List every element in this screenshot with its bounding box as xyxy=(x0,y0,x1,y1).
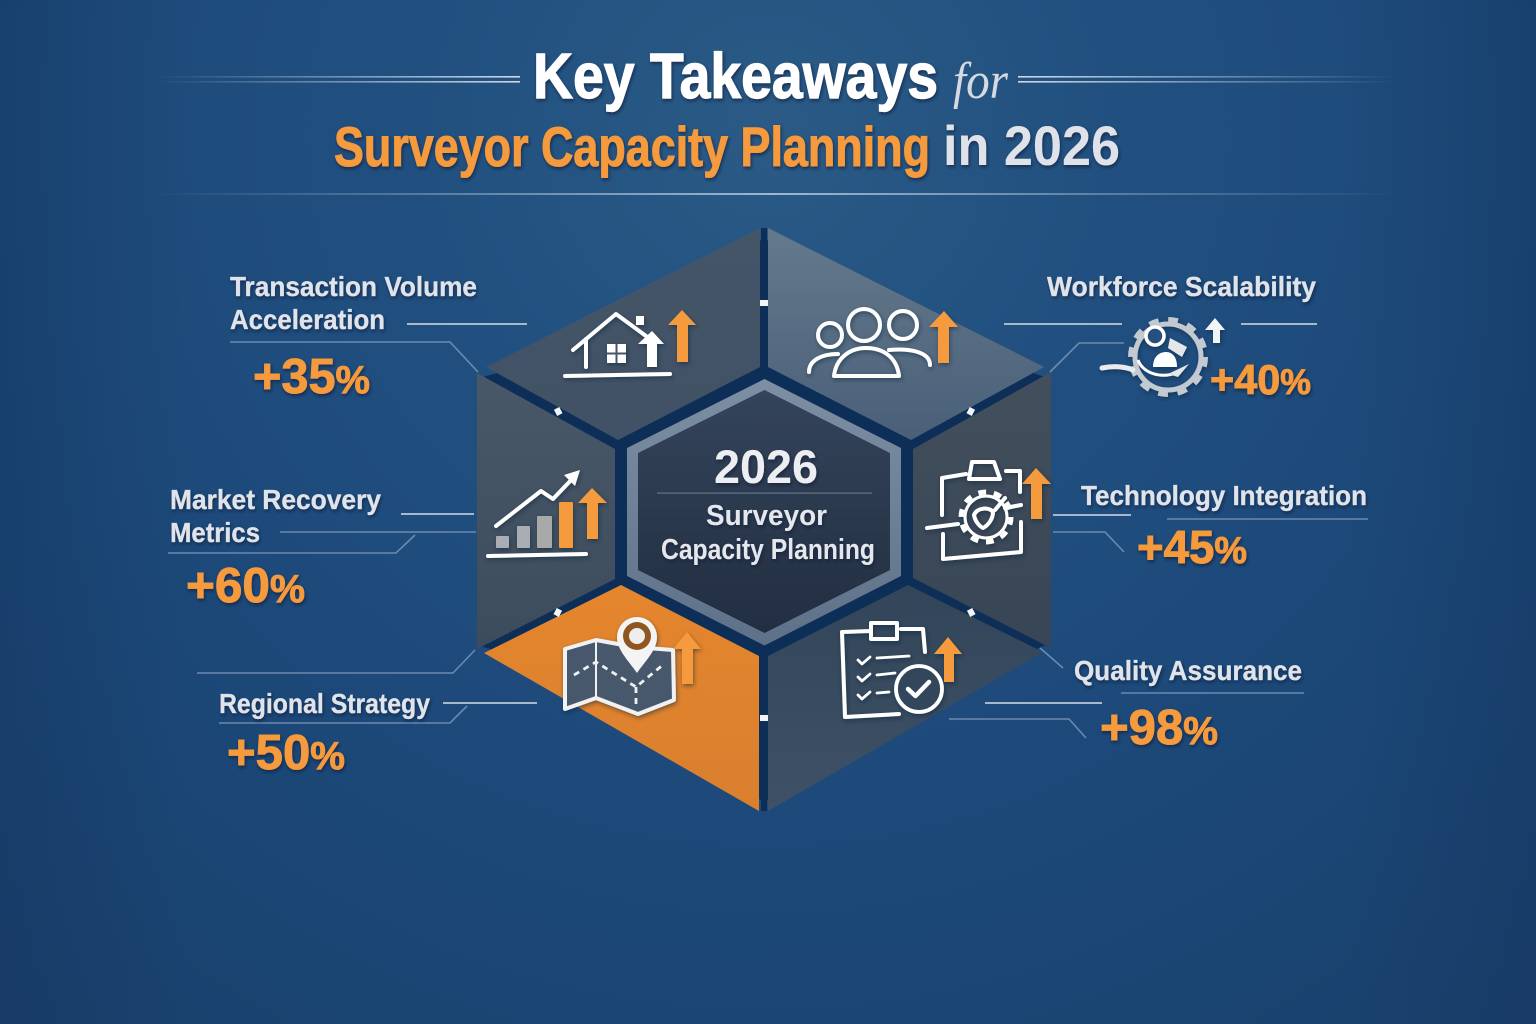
callout: technology integration xyxy=(1081,480,1367,573)
panel: bottom left orange xyxy=(484,585,759,811)
callout: transaction volume xyxy=(230,271,477,404)
panel: bottom right xyxy=(768,585,1043,811)
icon: workforce gear xyxy=(1102,318,1225,394)
title heading line 1: for xyxy=(953,53,1009,110)
panel: center hexagon xyxy=(627,379,901,646)
panel: left xyxy=(477,373,615,649)
callout: technology integration: Technology Integration xyxy=(1081,480,1367,511)
callout: workforce scalability: Workforce Scalability xyxy=(1047,271,1316,302)
callout: regional strategy: Regional Strategy xyxy=(219,688,430,719)
center year: 2026 xyxy=(714,440,818,493)
callout: workforce scalability: +40% xyxy=(1210,356,1311,403)
callout: regional strategy xyxy=(219,688,430,780)
icon: checklist clipboard xyxy=(842,623,962,717)
callout: technology integration: +45% xyxy=(1137,521,1247,573)
icon: people with arrow xyxy=(809,309,958,376)
icon: growth chart xyxy=(488,470,607,556)
callout: market recovery xyxy=(170,484,381,613)
panel: top left xyxy=(486,228,760,440)
callout: market recovery: Metrics xyxy=(170,517,260,548)
callout: market recovery: +60% xyxy=(186,559,305,613)
panel: top right xyxy=(768,228,1044,440)
callout: quality assurance: Quality Assurance xyxy=(1074,655,1302,686)
icon: house with arrows xyxy=(565,310,696,376)
callout: workforce scalability xyxy=(1047,271,1316,403)
connector lines xyxy=(168,324,1368,738)
title heading line 2: in 2026 xyxy=(943,114,1120,177)
title heading line 2: Surveyor Capacity Planning xyxy=(334,115,930,178)
title heading line 1: Key Takeaways xyxy=(533,40,938,112)
callout: market recovery: Market Recovery xyxy=(170,484,381,515)
panel: right xyxy=(913,372,1051,648)
callout: quality assurance xyxy=(1074,655,1302,755)
callout: transaction volume: Acceleration xyxy=(230,304,385,335)
callout: transaction volume: +35% xyxy=(253,350,370,404)
center label: Capacity Planning xyxy=(661,534,875,566)
title xyxy=(334,40,1120,178)
center label xyxy=(661,500,875,566)
icon: map with pin xyxy=(565,617,701,714)
callout: transaction volume: Transaction Volume xyxy=(230,271,477,302)
hexagon diagram xyxy=(477,228,1051,811)
callout: quality assurance: +98% xyxy=(1100,701,1218,755)
center label: Surveyor xyxy=(706,500,827,532)
callout: regional strategy: +50% xyxy=(227,726,345,780)
icon: technology gear xyxy=(927,462,1051,559)
